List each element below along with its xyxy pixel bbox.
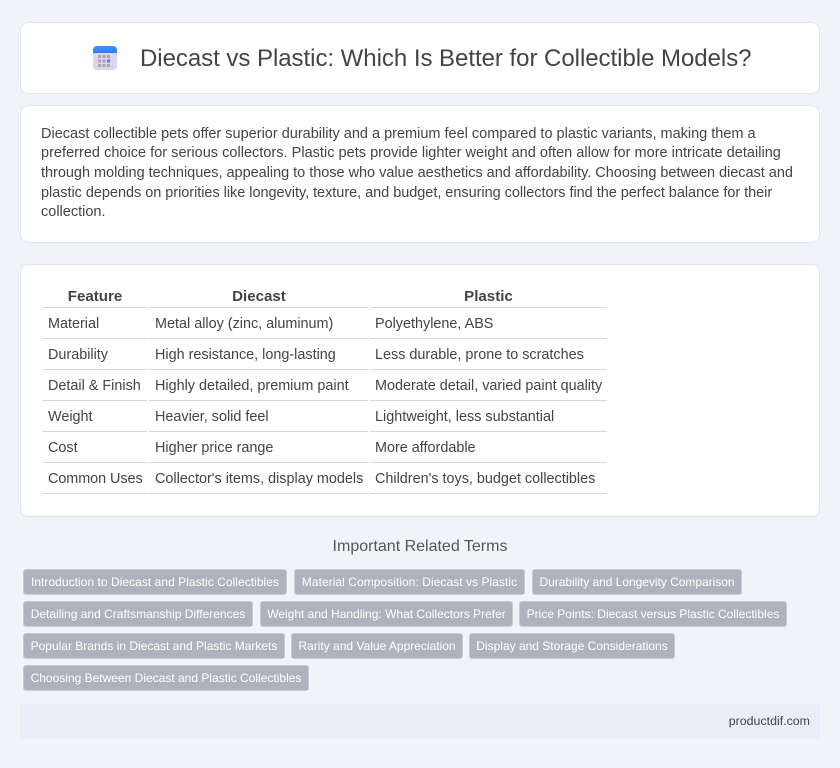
footer bar [20, 704, 820, 738]
row: weight [48, 409, 554, 425]
tag [23, 601, 253, 627]
tag [23, 665, 309, 691]
row: common uses: Children's toys, budget collectibles [375, 471, 595, 487]
row: common uses: Common Uses [48, 471, 143, 487]
tag [294, 569, 525, 595]
row: cost [48, 440, 476, 456]
table header [68, 288, 513, 305]
row: detail and finish: Moderate detail, varied paint quality [375, 378, 602, 394]
table: comparison [43, 288, 607, 494]
text block: introduction: preferred choice for serious collectors. Plastic pets provide lighter weight and often allow for more intricate detailing [41, 145, 781, 161]
tag: Rarity and Value Appreciation [298, 639, 456, 653]
tag [23, 569, 287, 595]
tag [532, 569, 742, 595]
panel: comparison table [20, 264, 820, 517]
tag: Popular Brands in Diecast and Plastic Markets [31, 639, 277, 653]
tag [291, 633, 463, 659]
tag [469, 633, 675, 659]
tag: Display and Storage Considerations [476, 639, 668, 653]
tag [519, 601, 787, 627]
panel: introduction [20, 105, 820, 243]
text block: introduction: through molding techniques, appealing to those who value aesthetics and affordability. Choosing between diecast and [41, 165, 793, 181]
table header: Diecast [232, 288, 286, 305]
tag: Introduction to Diecast and Plastic Collectibles [31, 575, 279, 589]
tag: Weight and Handling: What Collectors Prefer [267, 607, 506, 621]
row: durability [48, 347, 584, 363]
tag: Price Points: Diecast versus Plastic Collectibles [527, 607, 779, 621]
tag: Choosing Between Diecast and Plastic Collectibles [31, 671, 301, 685]
row: common uses: Collector's items, display models [155, 471, 363, 487]
text block: introduction [41, 126, 793, 220]
row: material: Material [48, 316, 99, 332]
tag: Durability and Longevity Comparison [539, 575, 735, 589]
text block: introduction: collection. [41, 204, 105, 220]
row: weight: Weight [48, 409, 93, 425]
tag: Material Composition: Diecast vs Plastic [302, 575, 517, 589]
text block: introduction: Diecast collectible pets offer superior durability and a premium feel compared to plastic variants, making them a [41, 126, 756, 142]
icon: calendar [93, 46, 117, 70]
row: material: Metal alloy (zinc, aluminum) [155, 316, 333, 332]
row: cost: Higher price range [155, 440, 273, 456]
row: cost: Cost [48, 440, 78, 456]
row: weight: Heavier, solid feel [155, 409, 269, 425]
row: material [48, 316, 493, 332]
row: common uses [48, 471, 595, 487]
heading: related terms: Important Related Terms [333, 538, 507, 555]
row: durability: Durability [48, 347, 108, 363]
row: weight: Lightweight, less substantial [375, 409, 554, 425]
tag: Detailing and Craftsmanship Differences [31, 607, 245, 621]
title: Diecast vs Plastic: Which Is Better for Collectible Models? [140, 45, 751, 72]
row: durability: High resistance, long-lasting [155, 347, 336, 363]
row: detail and finish: Highly detailed, premium paint [155, 378, 349, 394]
text block: introduction: plastic depends on priorities like longevity, texture, and budget, ensuring collectors find the perfect balance for their [41, 185, 772, 201]
panel: header [20, 22, 820, 94]
tag [23, 633, 285, 659]
footer source: productdif.com [729, 714, 810, 728]
table header: Plastic [464, 288, 513, 305]
row: cost: More affordable [375, 440, 476, 456]
row: durability: Less durable, prone to scratches [375, 347, 584, 363]
row: material: Polyethylene, ABS [375, 316, 493, 332]
table header: Feature [68, 288, 122, 305]
row: detail and finish [48, 378, 602, 394]
row: detail and finish: Detail & Finish [48, 378, 141, 394]
tag list: related terms [23, 569, 787, 691]
tag [260, 601, 513, 627]
